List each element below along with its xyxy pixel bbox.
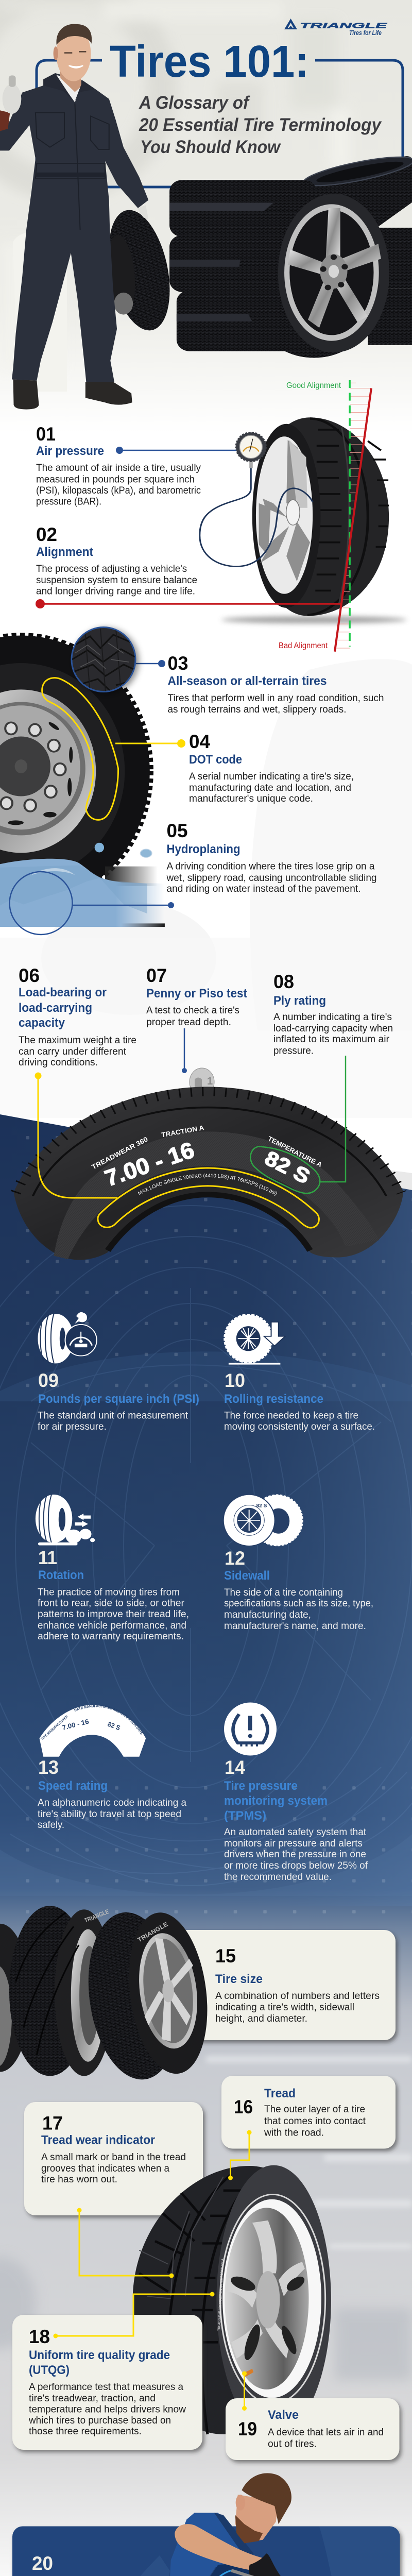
body text bbox=[224, 1411, 375, 1432]
illustration: main tire with alloy rim bbox=[133, 2165, 331, 2436]
illustration: three tires bbox=[0, 1906, 216, 2083]
connector: valve bbox=[242, 2371, 247, 2411]
illustration: mechanic with tire bbox=[0, 24, 179, 410]
icon: psi tire gauge bbox=[38, 1312, 97, 1363]
heading: Speed rating bbox=[38, 1779, 108, 1793]
body text: manufacturer's name, and more. bbox=[224, 1621, 366, 1632]
connector: alignment red line bbox=[36, 599, 341, 608]
label: bad alignment: Bad Alignment bbox=[279, 641, 328, 650]
icon: speed rating sidewall: DATE MANUFACTURED AND EXPIRATION DATE bbox=[74, 1705, 143, 1735]
panel: term 19 valve card bbox=[226, 2398, 400, 2460]
body text: The force needed to keep a tire bbox=[224, 1411, 358, 1421]
connector: tread bbox=[228, 2130, 251, 2180]
body text: A number indicating a tire's bbox=[273, 1012, 392, 1023]
logo: triangle tires for life: Tires for Life bbox=[349, 29, 382, 37]
body text: A combination of numbers and letters bbox=[215, 1991, 380, 2002]
callout: ply rating loop bbox=[250, 1056, 346, 1193]
body text: inflated to its maximum air bbox=[273, 1034, 390, 1045]
term 02: alignment bbox=[36, 524, 197, 597]
body text: patterns to improve their tread life, bbox=[38, 1609, 189, 1620]
heading: Ply rating bbox=[273, 994, 326, 1008]
body text: those three requirements. bbox=[29, 2426, 142, 2437]
panel: term 18 UTQG card bbox=[12, 2315, 202, 2450]
body text: A driving condition where the tires lose grip on a bbox=[167, 861, 375, 872]
heading: Uniform tire quality grade bbox=[29, 2348, 170, 2362]
label: good alignment: Good Alignment bbox=[286, 381, 341, 390]
body text: and riding on water instead of the pavement. bbox=[167, 884, 360, 894]
logo: triangle tires for life: TRIANGLE bbox=[300, 22, 388, 30]
sidewall markings: TRACTION A bbox=[161, 1124, 205, 1139]
number: 19 bbox=[238, 2418, 257, 2439]
body text: specifications such as its size, type, bbox=[224, 1598, 373, 1609]
heading: (TPMS) bbox=[224, 1809, 266, 1823]
connector: penny test line bbox=[182, 1028, 187, 1073]
body text bbox=[38, 1411, 188, 1432]
illustration: technician repairing a tire bbox=[162, 2473, 405, 2576]
subtitle bbox=[139, 93, 382, 157]
illustration: curved tire sidewall: MAX LOAD SINGLE 2000KG (4410 LBS) AT 7600KPS (110 psi) bbox=[138, 1174, 277, 1196]
panel: term 15 tire size card bbox=[149, 1930, 396, 2040]
body text bbox=[189, 771, 354, 804]
body text: load-carrying capacity when bbox=[273, 1023, 393, 1034]
body text: A device that lets air in and bbox=[268, 2427, 384, 2438]
body text: adhere to warranty requirements. bbox=[38, 1631, 184, 1642]
body text: manufacturing date and location, and bbox=[189, 783, 351, 793]
subtitle: 20 Essential Tire Terminology bbox=[139, 115, 382, 135]
icon: TPMS warning bbox=[224, 1702, 277, 1756]
illustration: tire stack with alloy wheel bbox=[169, 151, 412, 358]
heading: Alignment bbox=[36, 545, 93, 559]
body text: driving conditions. bbox=[19, 1057, 98, 1068]
body text bbox=[28, 2382, 186, 2437]
heading: Hydroplaning bbox=[167, 842, 240, 856]
body text: manufacturer's unique code. bbox=[189, 793, 313, 804]
body text: An automated safety system that bbox=[224, 1827, 367, 1838]
title: Tires 101: bbox=[110, 37, 309, 87]
body text: front to rear, side to side, or other bbox=[38, 1598, 185, 1608]
illustration: tire with pressure gauge and alignment guide bbox=[116, 380, 407, 652]
subtitle: You Should Know bbox=[140, 137, 282, 157]
connector: air pressure line bbox=[116, 447, 236, 454]
body text: the recommended value. bbox=[224, 1872, 332, 1883]
heading: Tread bbox=[264, 2087, 296, 2100]
number: 16 bbox=[234, 2096, 253, 2117]
body text: pressure. bbox=[273, 1046, 314, 1056]
body text bbox=[36, 463, 201, 507]
term 07: penny or piso test bbox=[146, 965, 247, 1028]
body text bbox=[36, 564, 197, 597]
heading: Tire size bbox=[215, 1972, 263, 1986]
connector: tread wear indicator bbox=[77, 2208, 174, 2278]
term 04: DOT code bbox=[189, 731, 354, 804]
term 03: all-season tires bbox=[168, 653, 384, 715]
body text: suspension system to ensure balance bbox=[36, 575, 197, 586]
icon: speed rating sidewall bbox=[39, 1705, 146, 1757]
heading: All-season or all-terrain tires bbox=[168, 674, 327, 688]
number: 01 bbox=[36, 423, 56, 445]
heading: monitoring system bbox=[224, 1794, 328, 1808]
icon: rotation bbox=[36, 1495, 95, 1546]
body text: Tires that perform well in any road condition, such bbox=[168, 693, 384, 704]
body text: An alphanumeric code indicating a bbox=[38, 1798, 186, 1808]
body text bbox=[38, 1587, 189, 1642]
body text: safely. bbox=[38, 1820, 64, 1831]
heading: capacity bbox=[19, 1016, 65, 1030]
term 12: sidewall bbox=[224, 1548, 373, 1632]
body text: (PSI), kilopascals (kPa), and barometric bbox=[36, 485, 201, 496]
tire brand marks bbox=[83, 1908, 169, 1944]
body text: moving consistently over a surface. bbox=[224, 1421, 375, 1432]
panel: term 20 vulcanization card bbox=[12, 2527, 400, 2576]
heading: Pounds per square inch (PSI) bbox=[38, 1392, 199, 1406]
heading: Load-bearing or bbox=[19, 986, 107, 999]
body text bbox=[264, 2104, 366, 2138]
term 13: speed rating bbox=[38, 1757, 186, 1831]
callout: hydroplaning circle bbox=[9, 872, 174, 935]
body text bbox=[215, 1991, 380, 2024]
body text bbox=[19, 1035, 136, 1068]
icon: speed rating sidewall: 7.00 - 16 bbox=[61, 1718, 90, 1732]
number: 13 bbox=[38, 1757, 59, 1778]
icon: speed rating sidewall: TIRE MANUFACTURER bbox=[41, 1715, 69, 1741]
body text: drivers when the pressure in one bbox=[224, 1849, 366, 1860]
body text: can carry under different bbox=[19, 1046, 127, 1057]
term 01: air pressure bbox=[36, 423, 201, 507]
ghost tire background bbox=[13, 231, 67, 392]
tire brand marks: TRIANGLE bbox=[83, 1908, 110, 1924]
body text: The process of adjusting a vehicle's bbox=[36, 564, 187, 574]
body text bbox=[38, 1798, 186, 1831]
icon: sidewall bbox=[224, 1495, 302, 1546]
body text: grooves that indicates when a bbox=[41, 2163, 169, 2174]
body text: tire's ability to travel at top speed bbox=[38, 1809, 181, 1820]
body text: The maximum weight a tire bbox=[19, 1035, 136, 1046]
heading: Rolling resistance bbox=[224, 1392, 323, 1406]
alignment guide bbox=[335, 380, 371, 652]
heading: DOT code bbox=[189, 753, 242, 767]
body text: out of tires. bbox=[268, 2439, 317, 2449]
body text bbox=[224, 1587, 373, 1632]
body text: and longer driving range and tire life. bbox=[36, 586, 195, 597]
term 14: tire pressure monitoring system bbox=[224, 1757, 368, 1883]
illustration: curved tire sidewall bbox=[11, 1087, 406, 1260]
body text: A serial number indicating a tire's size, bbox=[189, 771, 354, 782]
body text: or more tires drops below 25% of bbox=[224, 1860, 368, 1871]
body text: The standard unit of measurement bbox=[38, 1411, 188, 1421]
body text: as rough terrains and wet, slippery roads. bbox=[168, 704, 346, 715]
icon: sidewall: 82 S bbox=[256, 1503, 267, 1509]
body text: The side of a tire containing bbox=[224, 1587, 343, 1598]
heading: Rotation bbox=[38, 1568, 84, 1582]
callout: DOT code band bbox=[42, 678, 185, 820]
number: 10 bbox=[225, 1370, 245, 1391]
number: 18 bbox=[29, 2326, 50, 2347]
body text bbox=[268, 2427, 384, 2449]
body text: tire's treadwear, traction, and bbox=[29, 2393, 156, 2404]
body text: that comes into contact bbox=[264, 2116, 366, 2127]
body text: with the road. bbox=[264, 2128, 324, 2138]
number: 07 bbox=[146, 965, 167, 986]
body text: A small mark or band in the tread bbox=[41, 2152, 186, 2163]
body text: for air pressure. bbox=[38, 1421, 107, 1432]
term 08: ply rating bbox=[273, 971, 393, 1056]
body text: measured in pounds per square inch bbox=[36, 474, 195, 485]
heading: Sidewall bbox=[224, 1569, 270, 1583]
term 10: rolling resistance bbox=[224, 1370, 375, 1432]
number: 04 bbox=[189, 731, 210, 752]
body text bbox=[41, 2152, 186, 2185]
body text: monitors air pressure and alerts bbox=[224, 1838, 363, 1849]
icon: rolling resistance bbox=[225, 1315, 285, 1365]
number: 17 bbox=[42, 2112, 63, 2134]
heading: load-carrying bbox=[19, 1001, 92, 1015]
body text: indicating a tire's width, sidewall bbox=[215, 2002, 354, 2013]
illustration: hydroplaning water bbox=[0, 843, 165, 927]
icon: pressure gauge bbox=[200, 432, 313, 567]
sidewall markings: TEMPERATURE A bbox=[267, 1134, 323, 1169]
term 05: hydroplaning bbox=[166, 820, 377, 894]
number: 03 bbox=[168, 653, 188, 674]
body text bbox=[146, 1005, 239, 1028]
number: 02 bbox=[36, 524, 57, 545]
panel: term 17 tread wear indicator card bbox=[24, 2102, 203, 2215]
body text: manufacturing date, bbox=[224, 1609, 311, 1620]
body text: pressure (BAR). bbox=[36, 497, 101, 507]
number: 05 bbox=[167, 820, 187, 841]
term 06: load-bearing capacity bbox=[19, 965, 136, 1068]
body text: which tires to purchase based on bbox=[28, 2415, 171, 2426]
body text: wet, slippery road, causing uncontrollable sliding bbox=[166, 873, 377, 884]
number: 11 bbox=[38, 1547, 57, 1568]
body text: The practice of moving tires from bbox=[38, 1587, 180, 1598]
subtitle: A Glossary of bbox=[139, 93, 250, 113]
heading bbox=[29, 2348, 170, 2377]
panel: term 16 tread card bbox=[221, 2076, 396, 2148]
body text: A test to check a tire's bbox=[146, 1005, 239, 1016]
connector: UTQG bbox=[54, 2292, 214, 2338]
body text bbox=[168, 693, 384, 715]
icon: speed rating sidewall: 82 S bbox=[107, 1720, 122, 1732]
heading: Air pressure bbox=[36, 444, 104, 458]
body text: A performance test that measures a bbox=[29, 2382, 183, 2393]
number: 20 bbox=[32, 2553, 53, 2574]
number: 12 bbox=[225, 1548, 245, 1569]
body text bbox=[166, 861, 377, 894]
term 11: rotation bbox=[38, 1547, 189, 1642]
sidewall markings: 82 S bbox=[261, 1147, 314, 1189]
term 09: pounds per square inch bbox=[38, 1370, 199, 1432]
sidewall markings: 7.00 - 16 bbox=[101, 1138, 197, 1191]
number: 14 bbox=[225, 1757, 245, 1778]
body text: temperature and helps drivers know bbox=[29, 2404, 186, 2415]
body text: tire has worn out. bbox=[41, 2174, 117, 2185]
sidewall markings bbox=[90, 1124, 323, 1191]
tire brand marks: TRIANGLE bbox=[136, 1920, 169, 1944]
body text: The outer layer of a tire bbox=[264, 2104, 365, 2115]
body text: enhance vehicle performance, and bbox=[38, 1620, 186, 1631]
body text bbox=[273, 1012, 393, 1056]
body text: height, and diameter. bbox=[215, 2013, 307, 2024]
heading: Penny or Piso test bbox=[146, 987, 247, 1001]
number: 09 bbox=[38, 1370, 59, 1391]
sidewall markings: TREADWEAR 360 bbox=[90, 1135, 149, 1171]
icon: piso coin bbox=[190, 1068, 214, 1096]
sidewall grade text: TREAD WEAR 320 TRACTION AA TEMPERATURE A bbox=[217, 2258, 225, 2331]
heading bbox=[224, 1779, 328, 1823]
heading: Tread wear indicator bbox=[41, 2133, 155, 2147]
illustration: large truck tire and wheel bbox=[0, 635, 151, 907]
number: 08 bbox=[273, 971, 294, 992]
heading: Valve bbox=[268, 2408, 299, 2422]
heading: (UTQG) bbox=[29, 2363, 70, 2377]
number: 15 bbox=[215, 1945, 236, 1967]
body text: The amount of air inside a tire, usually bbox=[36, 463, 201, 473]
callout: tread detail circle bbox=[72, 628, 165, 693]
header title frame bbox=[37, 60, 403, 187]
body text: proper tread depth. bbox=[146, 1017, 231, 1028]
heading: Tire pressure bbox=[224, 1779, 298, 1793]
icon: piso coin: 1 bbox=[207, 1076, 213, 1087]
number: 06 bbox=[19, 965, 40, 986]
logo: triangle tires for life bbox=[284, 19, 388, 37]
body text bbox=[224, 1827, 368, 1883]
callout: load capacity band bbox=[35, 1073, 319, 1228]
heading bbox=[19, 986, 107, 1030]
